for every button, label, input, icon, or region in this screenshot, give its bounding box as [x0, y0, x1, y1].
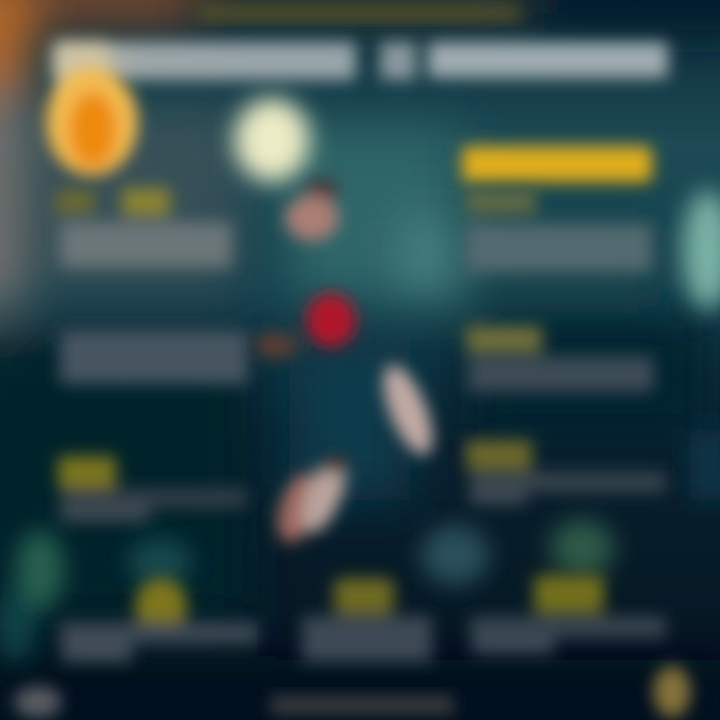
panel: lower right block	[466, 440, 666, 504]
panel: top right block	[466, 190, 652, 272]
footer: center text	[270, 696, 454, 714]
footer: right badge	[653, 666, 691, 718]
text block	[60, 222, 232, 268]
kicker strip	[200, 6, 520, 20]
text block	[470, 472, 666, 492]
icon: figure top	[285, 179, 339, 241]
icon: moon	[234, 98, 310, 182]
panel: top left block	[56, 188, 232, 268]
heading	[58, 456, 116, 488]
text block	[60, 622, 258, 644]
panel: middle left block	[60, 330, 248, 384]
panel: lower left block	[58, 456, 246, 522]
icon badge	[135, 578, 187, 634]
title	[52, 40, 668, 102]
panel: bottom center column	[302, 578, 432, 662]
icon: red figure	[254, 293, 356, 359]
text block	[466, 224, 652, 272]
icon: sun flame	[46, 68, 138, 176]
panel: bottom right column	[470, 575, 666, 654]
panel: bottom left column	[60, 578, 258, 662]
heading	[466, 190, 536, 214]
text block	[470, 616, 666, 638]
footer: left mark	[14, 686, 62, 718]
heading: top right banner	[462, 146, 652, 182]
panel: middle right block	[466, 326, 654, 392]
decorative green glows	[0, 520, 614, 661]
icon: pink feather	[373, 359, 443, 461]
icon: pink figure bottom	[270, 452, 355, 548]
text block	[60, 330, 248, 384]
text block	[302, 616, 432, 662]
icon badge	[334, 578, 394, 614]
icon badge	[534, 575, 604, 613]
heading	[466, 440, 532, 470]
heading	[466, 326, 542, 352]
heading	[56, 188, 170, 216]
text block	[60, 488, 246, 508]
text block	[468, 356, 654, 392]
